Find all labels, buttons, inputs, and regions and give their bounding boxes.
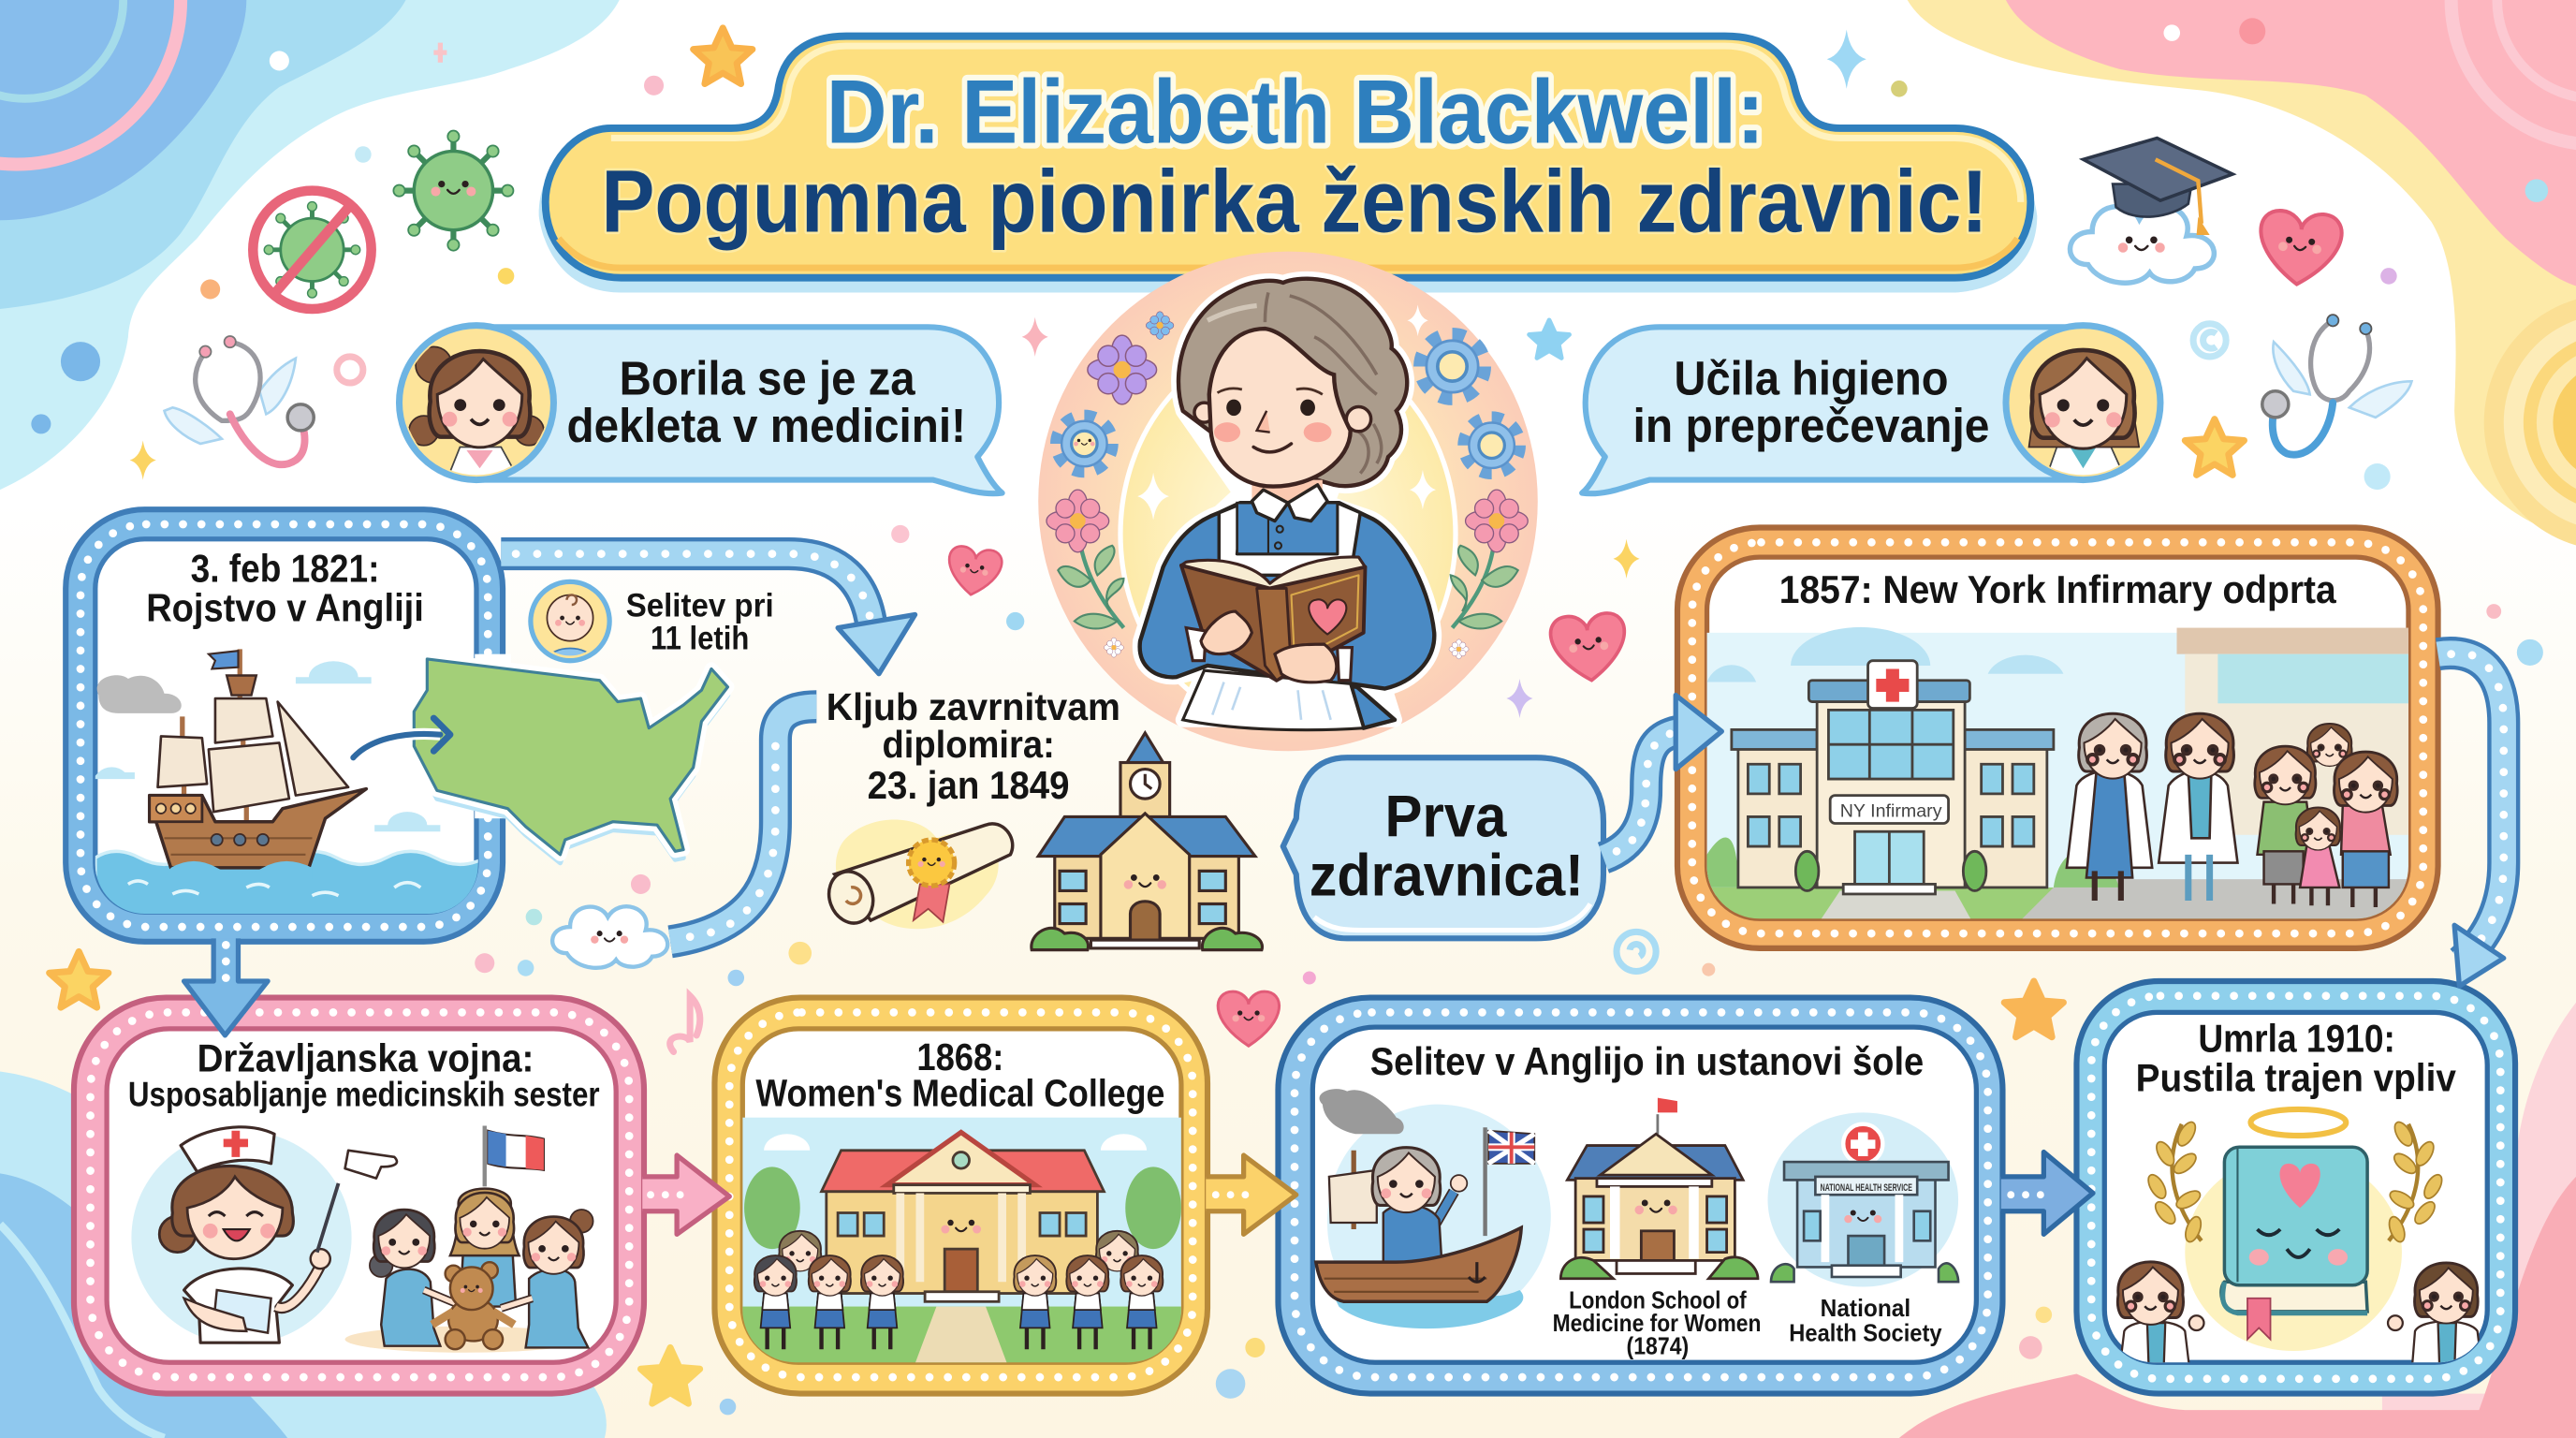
background building [2177, 628, 2408, 835]
flower wreath [1046, 304, 1528, 659]
icon: heart near portrait [944, 545, 1003, 598]
icon: star blue [1530, 320, 1570, 358]
icon: no virus sign [253, 191, 372, 309]
halo [2250, 1109, 2346, 1136]
icon: winged stethoscope right [2262, 315, 2411, 455]
central portrait: Elizabeth Blackwell [1038, 252, 1538, 751]
label: graduation: diplomira: [882, 723, 1055, 766]
doctors waving [2117, 1262, 2482, 1372]
open book [1181, 557, 1365, 681]
label: graduation: Kljub zavrnitvam [827, 685, 1120, 728]
National Health building: NATIONAL HEALTH SERVICE [1821, 1182, 1912, 1194]
icon: heart right of portrait [1549, 611, 1629, 683]
neck and collar [1251, 480, 1323, 503]
icon: star bottom [640, 1347, 700, 1403]
boat scene [1316, 1089, 1551, 1328]
panel heading: Umrla 1910: [2198, 1017, 2395, 1060]
icon: music note [670, 996, 700, 1051]
apron [1183, 503, 1364, 730]
teddy bear [432, 1262, 514, 1349]
title line 2: Pogumna pionirka ženskih zdravnic! [601, 153, 1988, 252]
National Health label: Health Society [1789, 1320, 1942, 1346]
woman white sticker outline [1140, 279, 1434, 720]
London School label: London School of [1569, 1287, 1747, 1313]
panel: New York Infirmary [1677, 527, 2438, 948]
icon: baby avatar [531, 581, 609, 661]
National Health label [1789, 1296, 1942, 1346]
panel: birth in England [66, 509, 503, 942]
label: graduation: 23. jan 1849 [868, 763, 1070, 807]
bubble: first doctor: Prva [1385, 785, 1507, 850]
icon: virus [393, 131, 513, 251]
ear [1346, 406, 1371, 432]
icon: graduation cap on cloud [2071, 138, 2232, 283]
National Health label: National [1821, 1296, 1910, 1322]
hospital building [1732, 661, 2054, 894]
family [2255, 724, 2397, 907]
National Health building [1767, 1112, 1958, 1287]
icon: star bottom left [50, 951, 109, 1007]
avatar girl [399, 326, 553, 480]
icon: cloth [345, 1151, 397, 1179]
flag of France [485, 1125, 544, 1186]
panel heading: 1868: [916, 1035, 1003, 1078]
icon: sparkles [130, 30, 1866, 718]
icon: diploma [822, 820, 1013, 930]
panel heading: Državljanska vojna: [198, 1036, 534, 1080]
college scene [742, 1118, 1181, 1372]
dress [1140, 503, 1434, 728]
face [1209, 329, 1351, 487]
icon: star top left [694, 28, 753, 84]
icon: heart bottom [1218, 991, 1280, 1046]
panel heading: Selitev v Anglijo in ustanovi šole [1370, 1040, 1924, 1083]
avatar woman [2006, 326, 2160, 480]
bubble text: Učila higieno [1674, 351, 1949, 404]
icon: heart top right [2257, 209, 2343, 287]
arrow: England to legacy [2001, 1152, 2093, 1234]
map: United States with arrow [353, 654, 728, 863]
panel: death and legacy [2076, 981, 2515, 1394]
panel: Women's Medical College [714, 998, 1208, 1394]
speech bubble right: in preprečevanje [1633, 399, 1989, 452]
label: graduation [827, 685, 1120, 807]
legacy book [2221, 1147, 2367, 1340]
speech bubble left [399, 326, 1003, 493]
laurel wreaths [2144, 1120, 2445, 1244]
connector arrow: first doctor to infirmary [1603, 696, 1721, 858]
nurse teaching [131, 1127, 352, 1344]
speech bubble left: dekleta v medicini! [567, 399, 966, 452]
title line 1: Dr. Elizabeth Blackwell: [827, 63, 1764, 163]
connector arrow: infirmary to final panel [2438, 653, 2504, 986]
bubble text: Borila se je za [620, 351, 915, 404]
panel heading: 3. feb 1821: [191, 547, 379, 590]
panel: birth in England: Rojstvo v Angliji [146, 587, 424, 630]
hospital sign: NY Infirmary [1840, 801, 1942, 821]
label: move at 11: Selitev pri [626, 587, 774, 624]
hospital scene [1707, 627, 2408, 920]
bubble: first doctor: zdravnica! [1310, 844, 1584, 909]
icon: star orange [2004, 981, 2063, 1037]
London School label: Medicine for Women [1553, 1311, 1761, 1337]
speech bubble right [1582, 326, 2160, 493]
hands and cuffs [1186, 611, 1352, 682]
connector arrow: birth to civil war [184, 938, 268, 1035]
icon: winged stethoscope left [165, 336, 314, 464]
bubble: first doctor [1283, 757, 1603, 938]
hair [1178, 279, 1407, 486]
London School label [1553, 1287, 1761, 1359]
icon: school [1032, 733, 1262, 950]
icon: cloud [552, 906, 667, 968]
icon: crescent ring [2193, 324, 2226, 357]
doctors [2067, 713, 2237, 901]
connector arrow: cloud to graduation [670, 707, 816, 942]
arrow: civil war to college [642, 1155, 729, 1234]
sea and ship [92, 649, 485, 920]
heading banner [539, 37, 2037, 292]
panel: move to England and founding schools [1278, 998, 2002, 1394]
icon: swirl [1617, 932, 1656, 971]
arrow: college to England [1206, 1155, 1296, 1234]
label: move at 11 [626, 587, 774, 656]
panel: civil war nurse training [74, 998, 644, 1394]
panel heading: 1857: New York Infirmary odprta [1779, 568, 2337, 611]
connector arrow: birth panel to graduation [501, 554, 915, 674]
nurses with teddy [345, 1189, 593, 1353]
icon: star right [2185, 419, 2244, 475]
panel: Women's Medical College: Women's Medical College [755, 1071, 1164, 1114]
label: move at 11: 11 letih [651, 620, 749, 656]
London School label: (1874) [1627, 1333, 1689, 1359]
London School building [1560, 1098, 1758, 1279]
panel: death and legacy: Pustila trajen vpliv [2136, 1057, 2456, 1100]
panel: civil war nurse training: Usposabljanje medicinskih sester [128, 1075, 600, 1113]
